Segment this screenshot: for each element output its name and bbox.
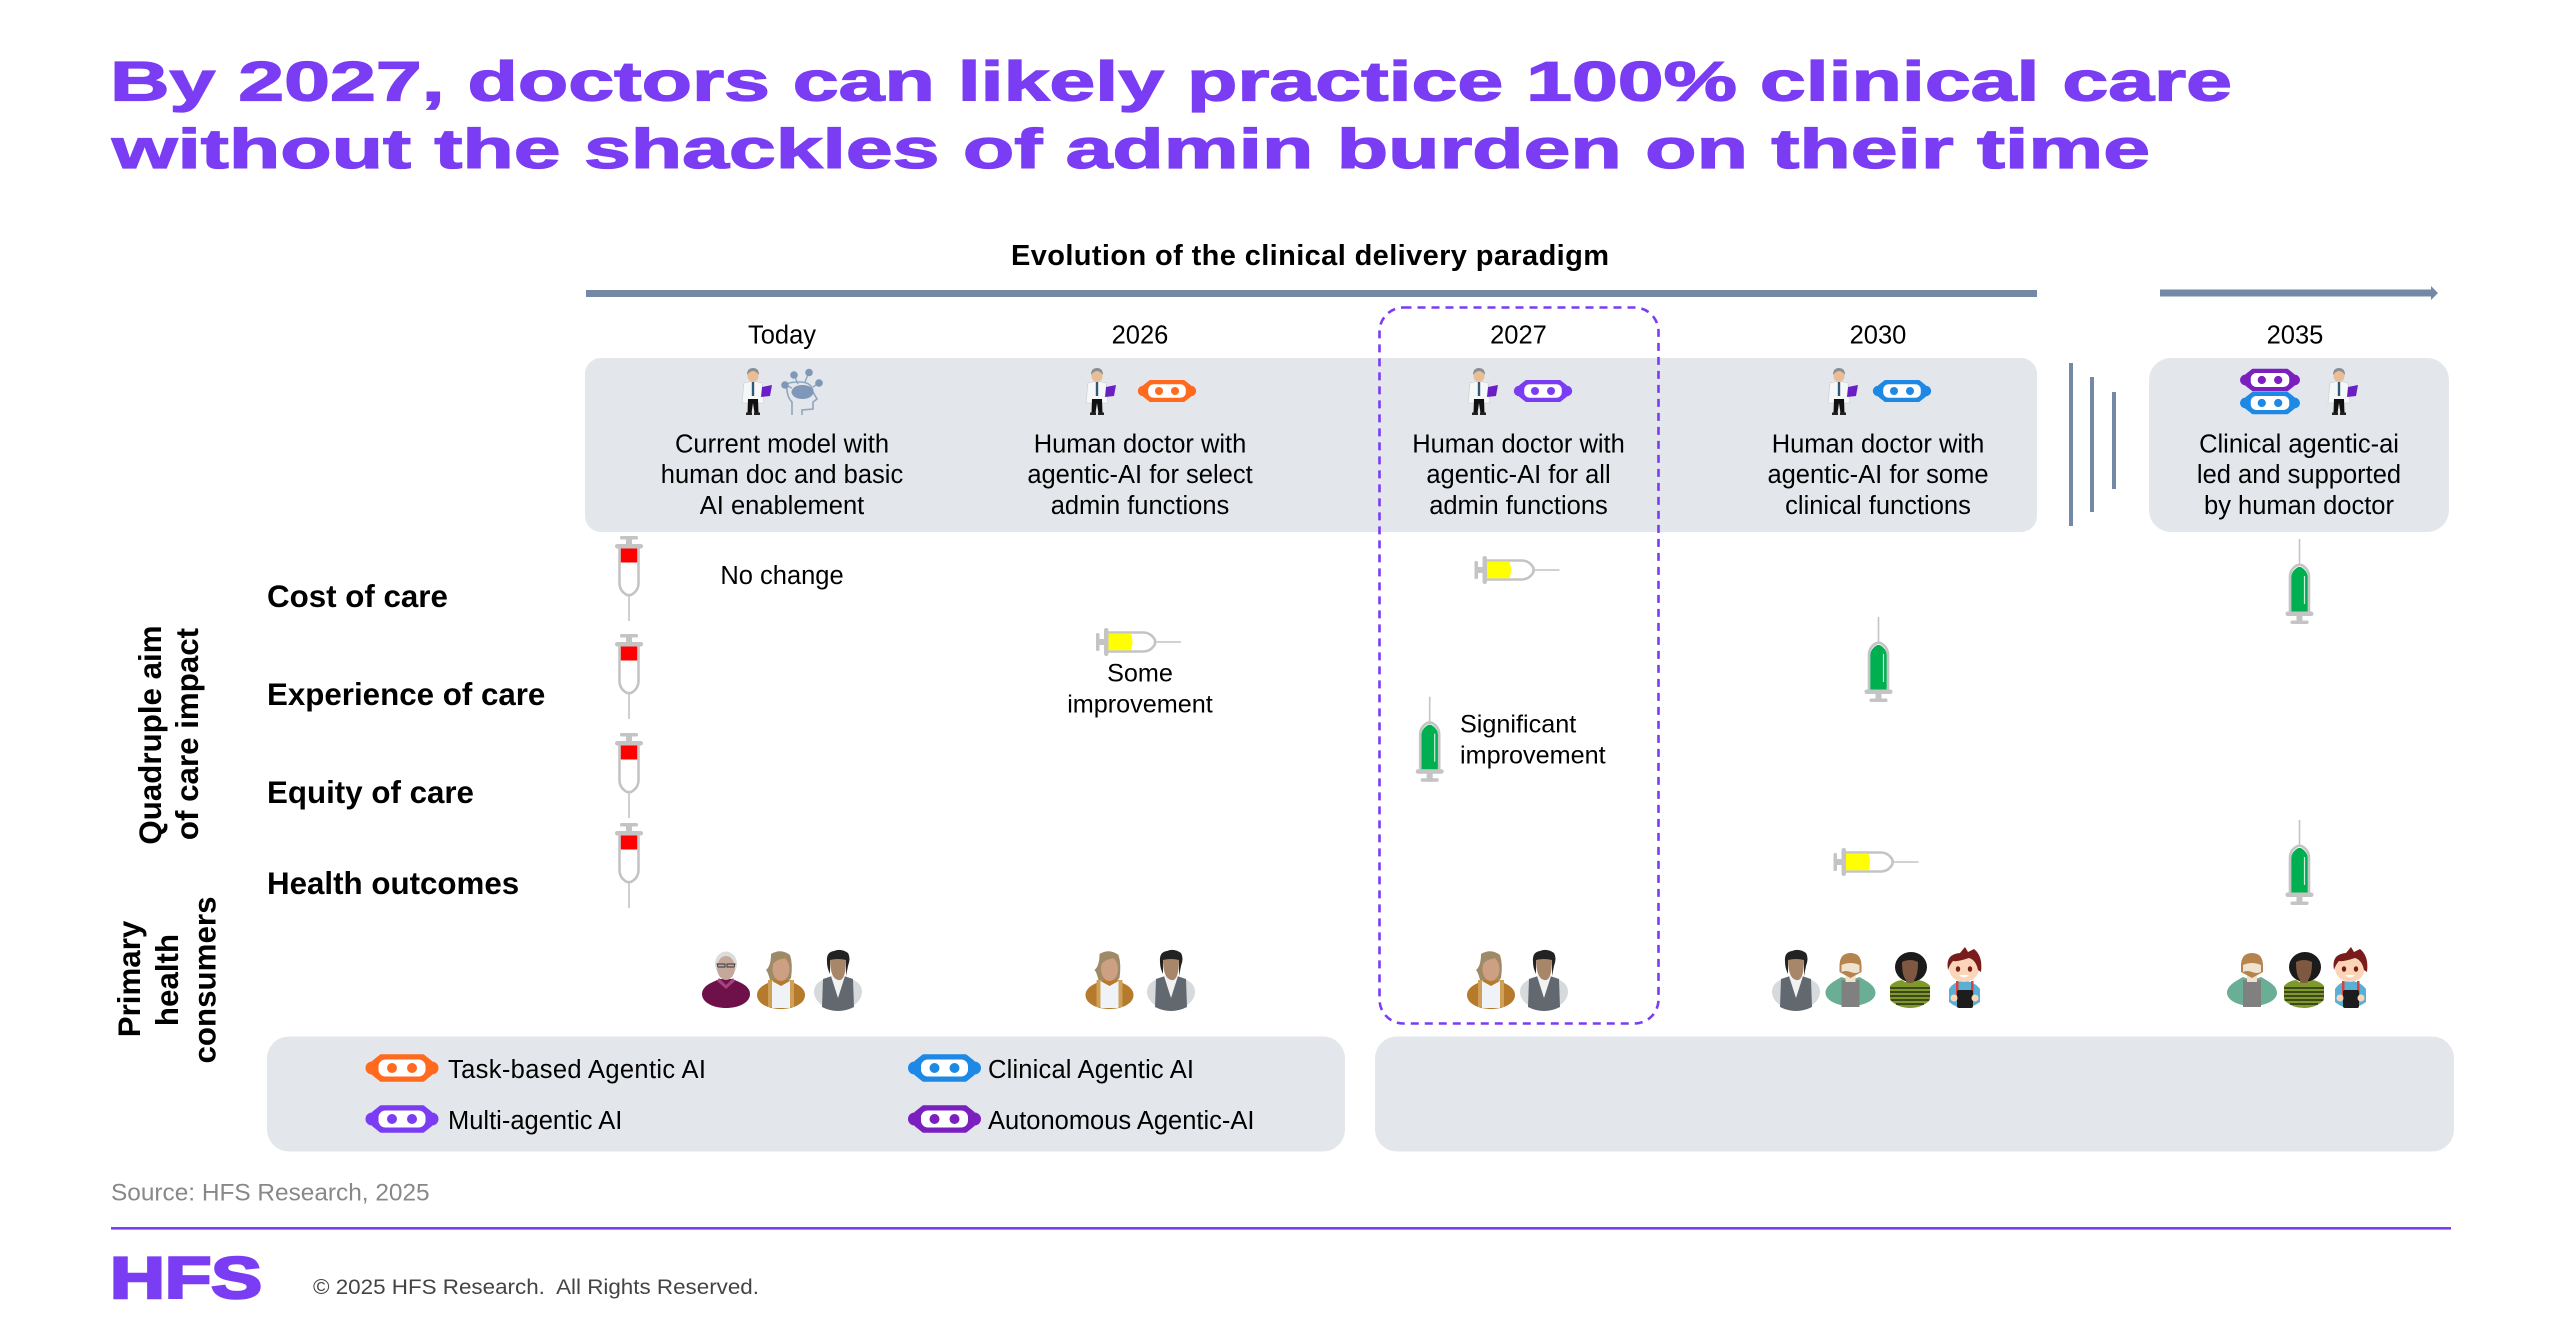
side label: primary health consumers: consumers [188, 897, 222, 1063]
consumers: 2026 [1086, 950, 1195, 1011]
copyright: © 2025 HFS Research. All Rights Reserved. [313, 1275, 759, 1299]
description: by human doctor [2204, 492, 2394, 520]
description: Current model with [675, 430, 889, 458]
year label: 2027 [1490, 322, 1547, 350]
timeline arrow: 2035 onward [2160, 286, 2438, 300]
icon: doctor [742, 368, 772, 415]
label: significant improvement: improvement [1460, 742, 1606, 770]
column: today [661, 322, 903, 520]
source: Source: HFS Research, 2025 [111, 1180, 430, 1206]
title [110, 50, 2232, 180]
legend item: clinical agentic AI: Clinical Agentic AI [988, 1056, 1194, 1084]
legend item: multi-agentic AI [366, 1107, 622, 1135]
side label: primary health consumers: health [150, 934, 185, 1026]
label: some improvement: Some [1107, 660, 1173, 688]
description: Human doctor with [1772, 430, 1984, 458]
column: 2026 [1027, 322, 1253, 520]
panel: legend [267, 1036, 1345, 1152]
panel: stage 2035 [2149, 358, 2449, 532]
syringe: 2030 experience of care [1864, 617, 1892, 702]
legend item: autonomous agentic-AI: Autonomous Agentic-AI [988, 1107, 1254, 1135]
description: Clinical agentic-ai [2199, 430, 2399, 458]
icon: clinical agentic AI robot [2240, 393, 2300, 413]
column: 2035 [2197, 322, 2401, 520]
row label: cost of care: Cost of care [267, 579, 448, 614]
syringe: 2035 cost of care [2286, 539, 2314, 624]
side label: quadruple aim of care impact: of care impact [170, 627, 205, 840]
description: agentic-AI for select [1027, 461, 1253, 489]
description: Human doctor with [1034, 430, 1246, 458]
consumers: today [702, 950, 862, 1011]
panel: empty legend area [1375, 1036, 2454, 1152]
panel: stages today to 2030 [585, 358, 2037, 532]
description: AI enablement [700, 492, 864, 520]
description: human doc and basic [661, 461, 903, 489]
year label: Today [748, 322, 816, 350]
icon: multi-agentic AI robot [1514, 381, 1572, 401]
syringe: 2026 some improvement [1096, 628, 1181, 656]
description: agentic-AI for all [1426, 461, 1611, 489]
row label: health outcomes: Health outcomes [267, 866, 519, 901]
description: agentic-AI for some [1767, 461, 1989, 489]
row label: experience of care: Experience of care [267, 677, 545, 712]
column: 2030 [1767, 322, 1989, 520]
year label: 2026 [1112, 322, 1168, 350]
legend item: multi-agentic AI: Multi-agentic AI [448, 1107, 622, 1135]
label: some improvement: improvement [1067, 690, 1213, 718]
consumers: 2027 [1467, 950, 1568, 1011]
icon: doctor [1828, 368, 1858, 415]
title: without the shackles of admin burden on their time [110, 117, 2150, 180]
description: led and supported [2197, 461, 2401, 489]
title: By 2027, doctors can likely practice 100% clinical care [110, 50, 2232, 112]
year label: 2030 [1850, 322, 1906, 350]
consumers: 2035 [2227, 947, 2367, 1008]
side label: quadruple aim of care impact [133, 625, 205, 845]
logo: HFS: HFS [110, 1246, 262, 1311]
icon: AI brain head [781, 369, 823, 415]
label: significant improvement: Significant [1460, 710, 1576, 738]
icon: doctor [2328, 368, 2358, 415]
consumers: 2030 [1772, 947, 1981, 1011]
description: clinical functions [1785, 492, 1971, 520]
side label: primary health consumers: Primary [112, 920, 147, 1037]
highlight box: 2027 [1380, 308, 1658, 1024]
heading: evolution of the clinical delivery paradigm: Evolution of the clinical delivery paradigm [1011, 240, 1609, 272]
timeline break marks [2069, 363, 2116, 526]
syringe: 2027 significant improvement [1416, 697, 1444, 782]
timeline arrow: today to 2030 [586, 290, 2037, 297]
label: no change: No change [720, 562, 844, 590]
legend item: task-based agentic AI: Task-based Agentic AI [448, 1056, 706, 1084]
row label: equity of care: Equity of care [267, 775, 474, 810]
icon: autonomous agentic AI robot [2240, 370, 2300, 390]
description: Human doctor with [1412, 430, 1625, 458]
icon: clinical agentic AI robot [1873, 381, 1931, 401]
syringe: 2027 cost of care [1474, 556, 1560, 584]
year label: 2035 [2267, 322, 2323, 350]
icon: doctor [1468, 368, 1498, 415]
icon: task-based agentic AI robot [1138, 381, 1196, 401]
description: admin functions [1051, 492, 1229, 520]
description: admin functions [1429, 492, 1608, 520]
syringes: today, no change [615, 536, 643, 908]
side label: primary health consumers [112, 897, 222, 1063]
side label: quadruple aim of care impact: Quadruple aim [133, 625, 168, 845]
icon: doctor [1086, 368, 1116, 415]
syringe: 2035 health outcomes [2286, 820, 2314, 905]
column: 2027 [1412, 322, 1625, 520]
syringe: 2030 health outcomes [1834, 848, 1918, 876]
